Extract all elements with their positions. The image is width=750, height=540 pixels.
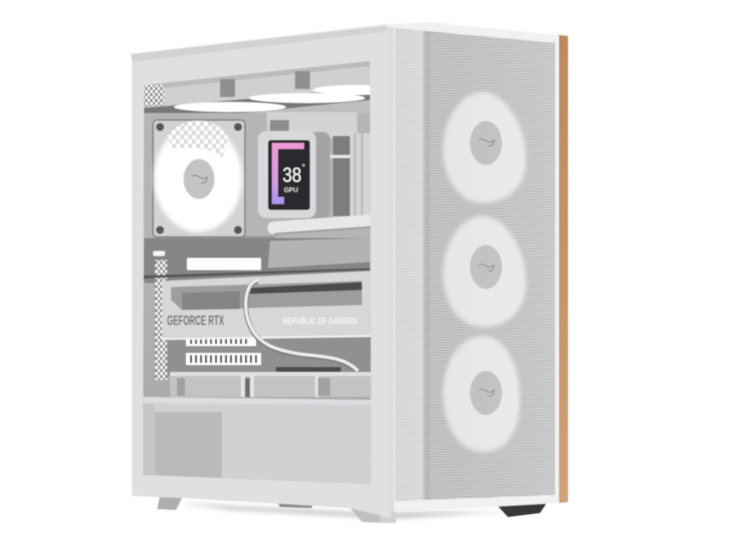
coolant tube lower (246, 281, 358, 372)
wood side panel (559, 35, 568, 503)
graphics card: GEFORCE RTX (167, 313, 224, 328)
LCD screen: GPU (284, 187, 298, 194)
front mesh panel (395, 28, 555, 501)
case feet (157, 496, 548, 523)
area below GPU (167, 336, 372, 376)
graphics card (130, 268, 371, 340)
coolant tube upper (274, 221, 372, 228)
lower backplate and slot (144, 238, 370, 283)
illustration: white mid-tower PC case (130, 22, 569, 524)
front panel frame (389, 22, 559, 512)
top radiator and fans (144, 66, 370, 114)
AIO pump with LCD (258, 131, 330, 219)
bottom fans (170, 372, 371, 397)
top edge (131, 24, 390, 62)
floor shadow (178, 503, 505, 519)
rear fan (153, 120, 245, 237)
PCI slot covers (186, 338, 261, 365)
motherboard backplate (144, 112, 369, 124)
LCD screen (268, 140, 310, 210)
PSU shroud cutout (155, 412, 222, 478)
LCD screen: 38 (282, 164, 302, 187)
window interior (142, 60, 372, 484)
PSU shroud (143, 397, 371, 490)
front fans (443, 92, 526, 452)
perforated rear slot strip (155, 260, 167, 380)
graphics card: REPUBLIC OF GAMERS (283, 316, 357, 326)
LCD screen: ° (302, 163, 305, 172)
side panel frame (132, 28, 391, 518)
